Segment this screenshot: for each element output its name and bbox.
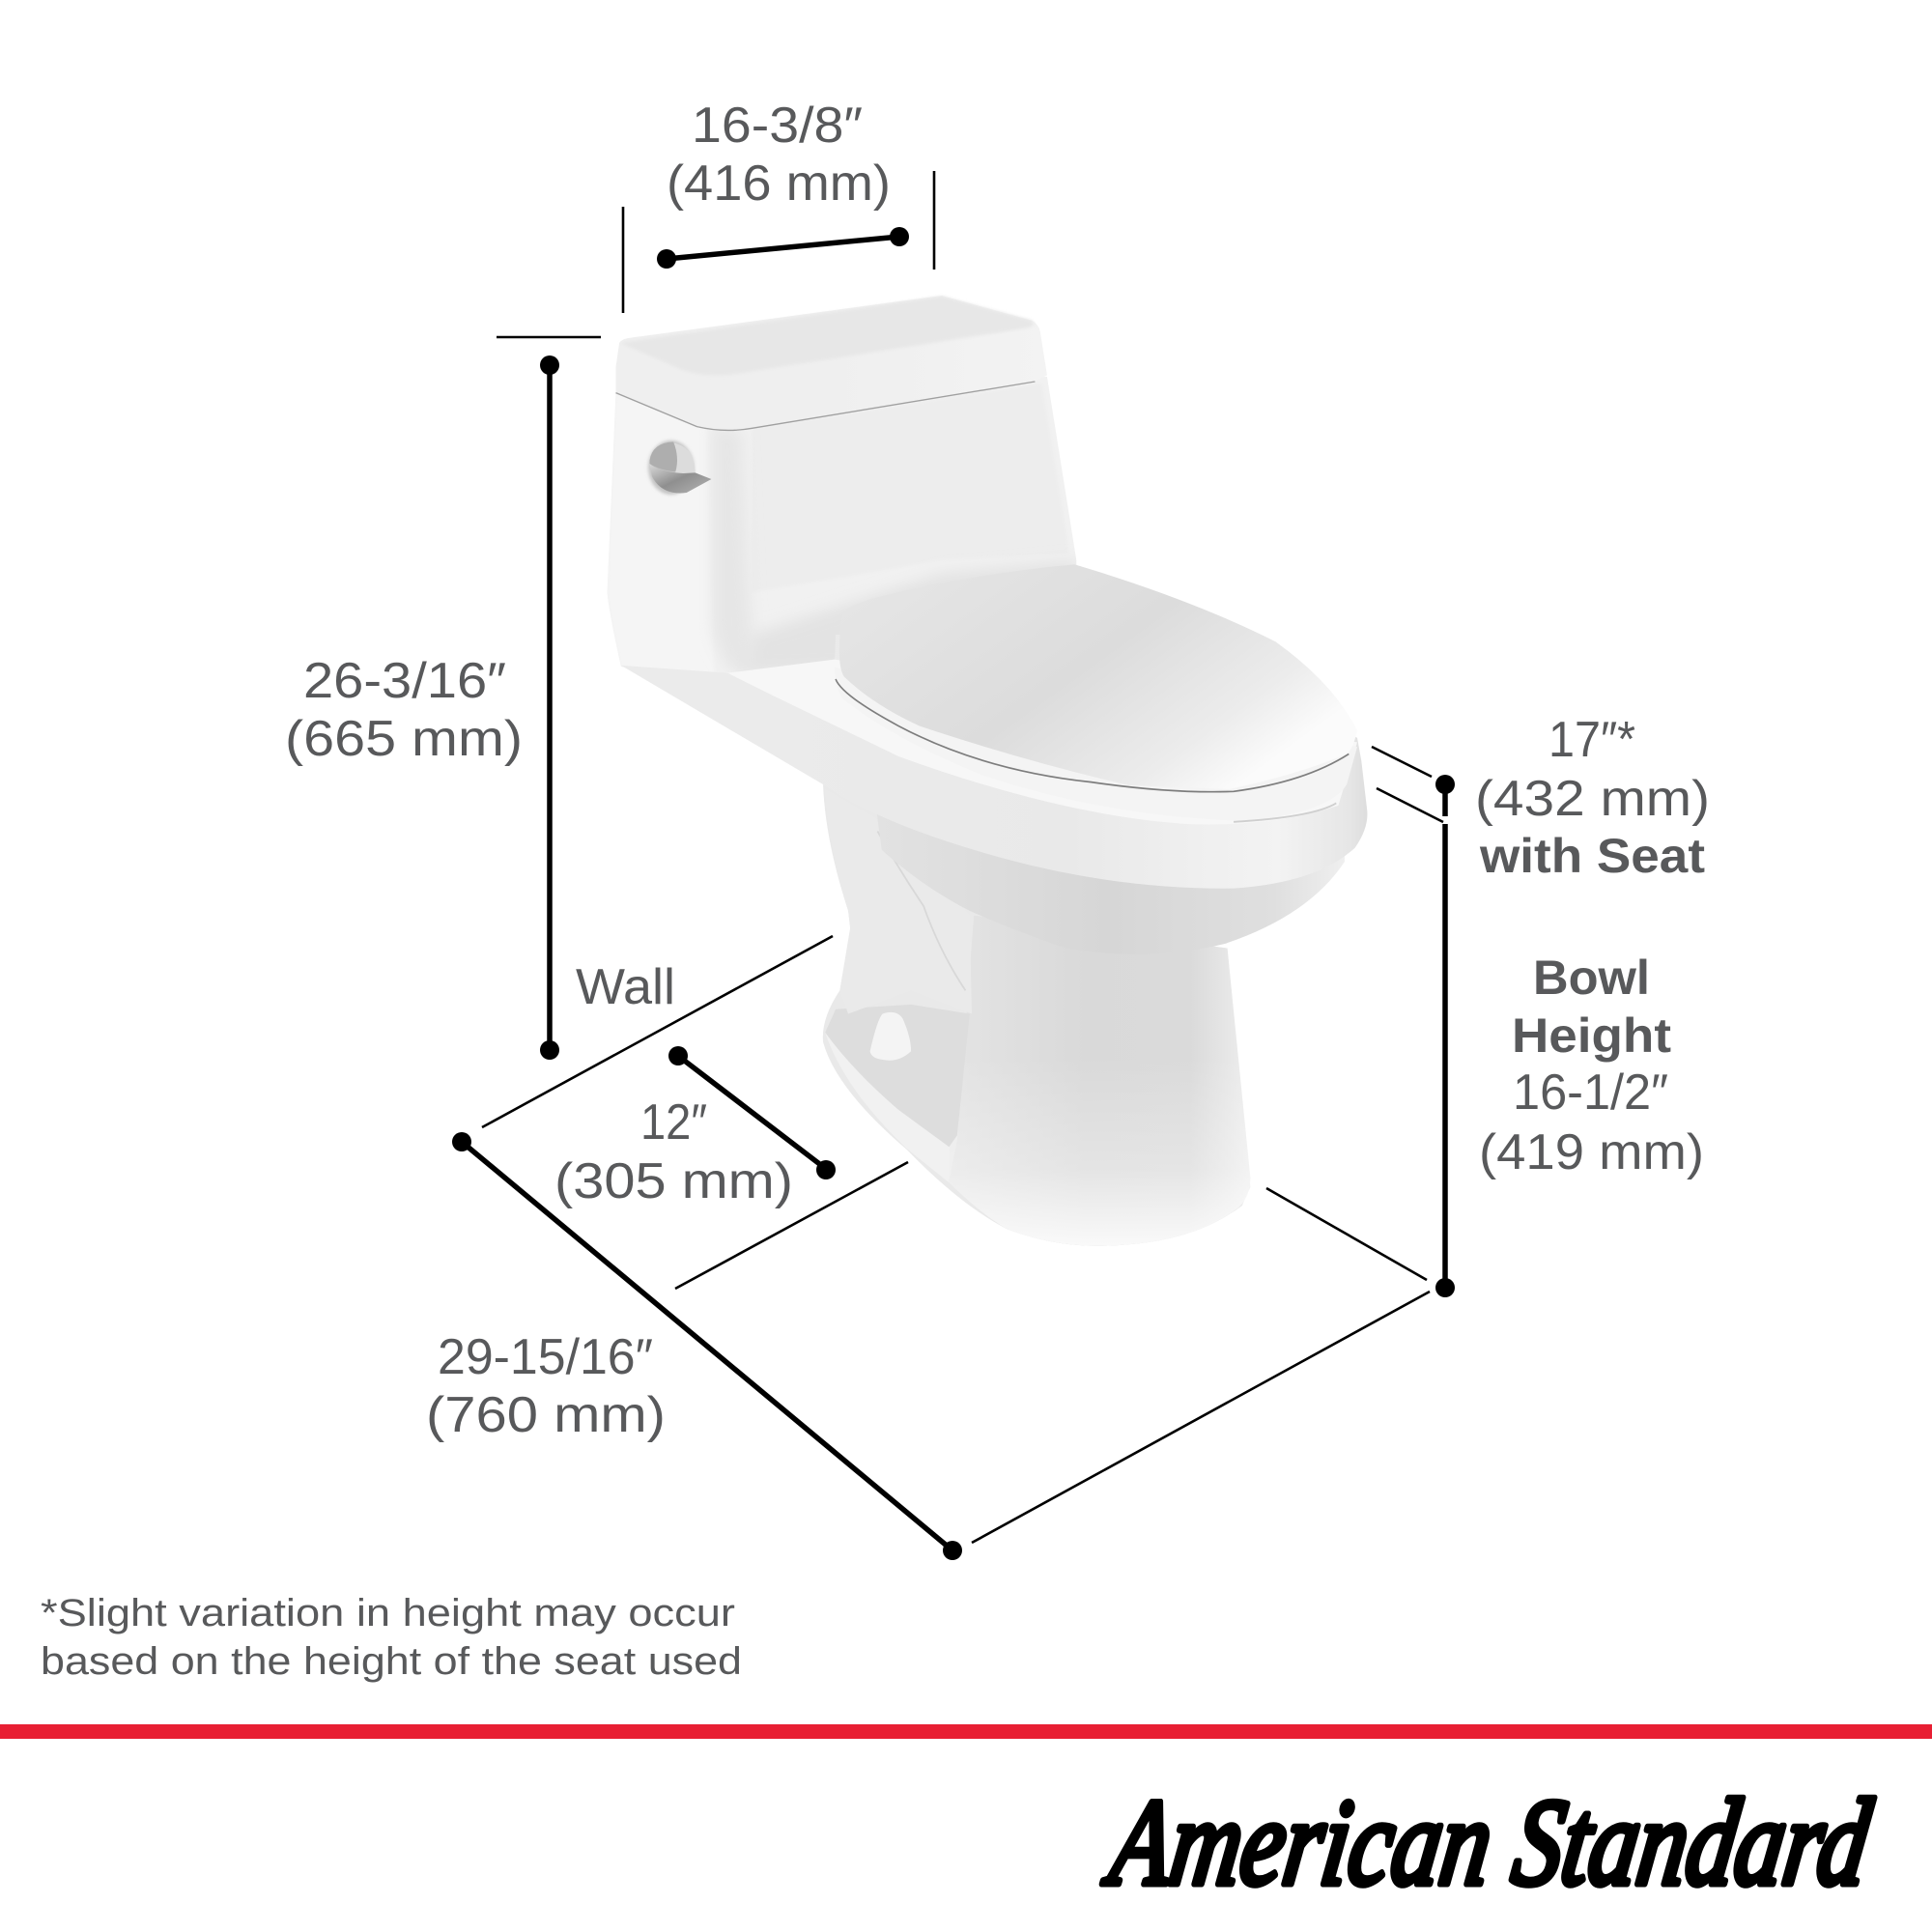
bolt cap [870, 1012, 911, 1061]
bowl underside [875, 803, 1345, 954]
red divider bar [0, 1724, 1932, 1739]
label: wall: Wall [576, 959, 675, 1015]
dimension: overall height: (665 mm) [285, 711, 523, 767]
dimension: overall height [285, 337, 601, 1060]
dimension: overall depth: 29-15/16″ [438, 1329, 653, 1385]
dimension: tank width [623, 98, 934, 313]
seat ring [835, 668, 1357, 821]
dimension: overall height: 26-3/16″ [303, 653, 506, 709]
pedestal [823, 784, 1250, 1246]
dimension: rough-in [554, 1046, 908, 1289]
dimension: seat and bowl height: 16-1/2″ [1513, 1065, 1668, 1121]
tank and platform [608, 296, 1076, 689]
dimension: overall depth: (760 mm) [426, 1387, 666, 1443]
rim [621, 635, 1367, 889]
dimension: tank width: 16-3/8″ [692, 98, 863, 154]
dimension: seat and bowl height [1372, 712, 1710, 1297]
bowl and pedestal [621, 564, 1367, 1246]
dimension: tank width: (416 mm) [667, 156, 891, 212]
dimension: rough-in: 12″ [640, 1094, 707, 1151]
dimension: seat and bowl height: (419 mm) [1479, 1124, 1704, 1180]
dimension: seat and bowl height: 17″* [1548, 712, 1635, 768]
dimension: seat and bowl height: Height [1512, 1009, 1671, 1063]
footnote: *Slight variation in height may occur [41, 1592, 735, 1634]
base flange [825, 1005, 970, 1148]
flush lever [648, 440, 711, 495]
footnote: based on the height of the seat used [41, 1640, 742, 1683]
dimension: rough-in: (305 mm) [554, 1153, 793, 1209]
dimension: seat and bowl height: Bowl [1533, 951, 1650, 1005]
dimension: overall depth [426, 1132, 1430, 1560]
trapway [825, 789, 972, 1014]
dimension: seat and bowl height: with Seat [1479, 829, 1705, 883]
seat lid [839, 564, 1357, 789]
dimension: seat and bowl height: (432 mm) [1475, 771, 1710, 827]
toilet illustration [608, 296, 1367, 1246]
footnote [41, 1592, 742, 1683]
label: wall [482, 936, 833, 1127]
tank lid [615, 296, 1047, 431]
